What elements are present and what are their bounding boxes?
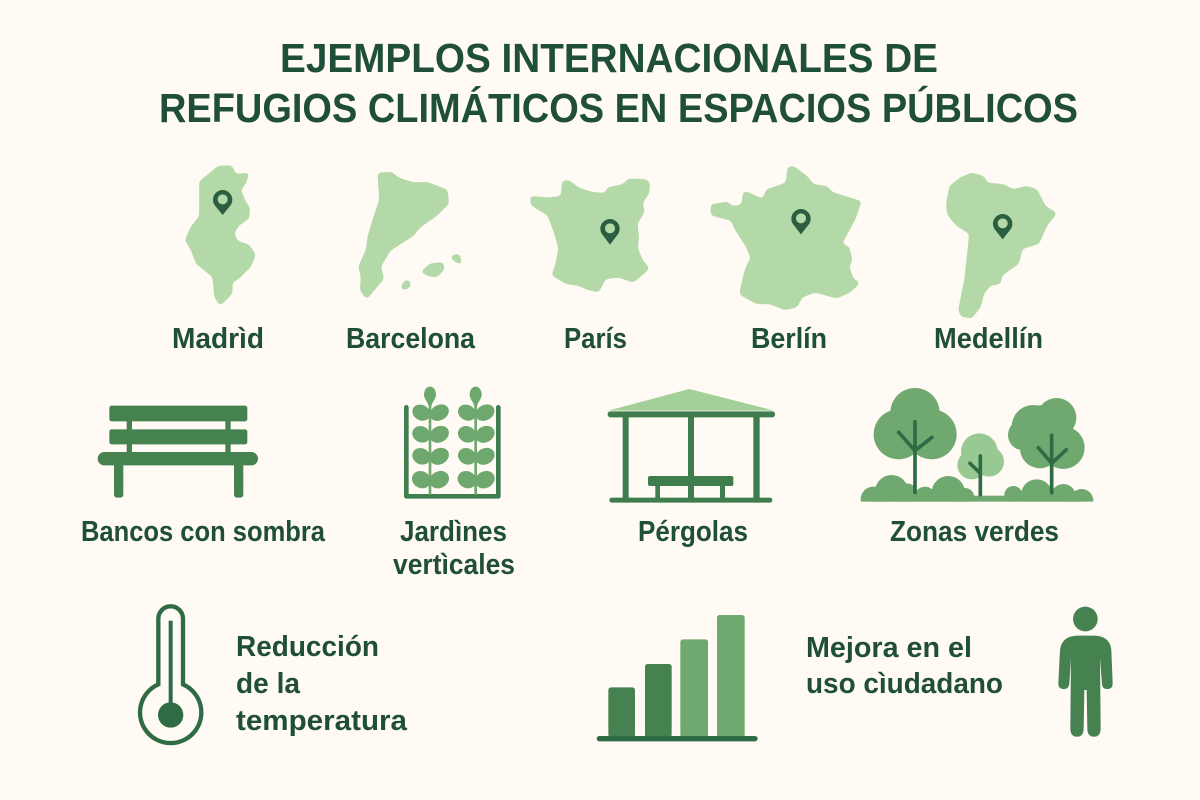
- text: temperature reduction: temperatura: [236, 705, 408, 737]
- item: temperature reduction: [140, 606, 408, 743]
- city: Berlin: [711, 167, 861, 355]
- icon: bench: [98, 406, 258, 498]
- city: Madrid: [172, 166, 264, 355]
- item: pergolas: [608, 389, 775, 548]
- map: Madrid: [186, 166, 255, 305]
- text: temperature reduction: [236, 631, 408, 737]
- map: Berlin: [711, 167, 861, 309]
- label: Medellin: Medellín: [934, 323, 1043, 355]
- label: Paris: París: [564, 323, 627, 355]
- icon: thermometer: [140, 606, 201, 743]
- city: Paris: [531, 179, 649, 355]
- item: green areas: [861, 388, 1093, 548]
- label: Madrid: Madrìd: [172, 323, 264, 355]
- text: improved citizen use: uso cìudadano: [806, 668, 1003, 700]
- item: vertical gardens: [393, 387, 515, 581]
- label: vertical gardens: Jardìnes: [400, 516, 507, 548]
- icon: vertical garden: [406, 387, 498, 496]
- label: pergolas: Pérgolas: [638, 516, 748, 548]
- item: shaded benches: [81, 406, 326, 548]
- text: improved citizen use: [806, 632, 1003, 700]
- map: Barcelona: [359, 173, 461, 298]
- item: improved citizen use: [597, 607, 1113, 741]
- map: Paris: [531, 179, 649, 292]
- label: Barcelona: Barcelona: [346, 323, 476, 355]
- map: Medellin: [947, 173, 1056, 318]
- title: REFUGIOS CLIMÁTICOS EN ESPACIOS PÚBLICOS: [159, 85, 1078, 131]
- label: shaded benches: Bancos con sombra: [81, 516, 326, 548]
- text: temperature reduction: de la: [236, 668, 301, 700]
- chart: rising bars: [597, 615, 758, 741]
- label: green areas: Zonas verdes: [890, 516, 1059, 548]
- icon: trees: [861, 388, 1093, 512]
- city: Medellin: [934, 173, 1056, 355]
- title: [159, 35, 1078, 131]
- city: Barcelona: [346, 173, 476, 355]
- text: temperature reduction: Reducción: [236, 631, 379, 663]
- panel: cities: [172, 166, 1056, 355]
- label: Berlin: Berlín: [751, 323, 827, 355]
- panel: shelter types: [81, 387, 1093, 581]
- icon: pergola: [608, 389, 775, 503]
- label: vertical gardens: vertìcales: [393, 549, 515, 581]
- icon: person: [1058, 607, 1113, 737]
- label: vertical gardens: [393, 516, 515, 581]
- panel: results: [140, 606, 1113, 743]
- title: EJEMPLOS INTERNACIONALES DE: [280, 35, 938, 81]
- text: improved citizen use: Mejora en el: [806, 632, 972, 664]
